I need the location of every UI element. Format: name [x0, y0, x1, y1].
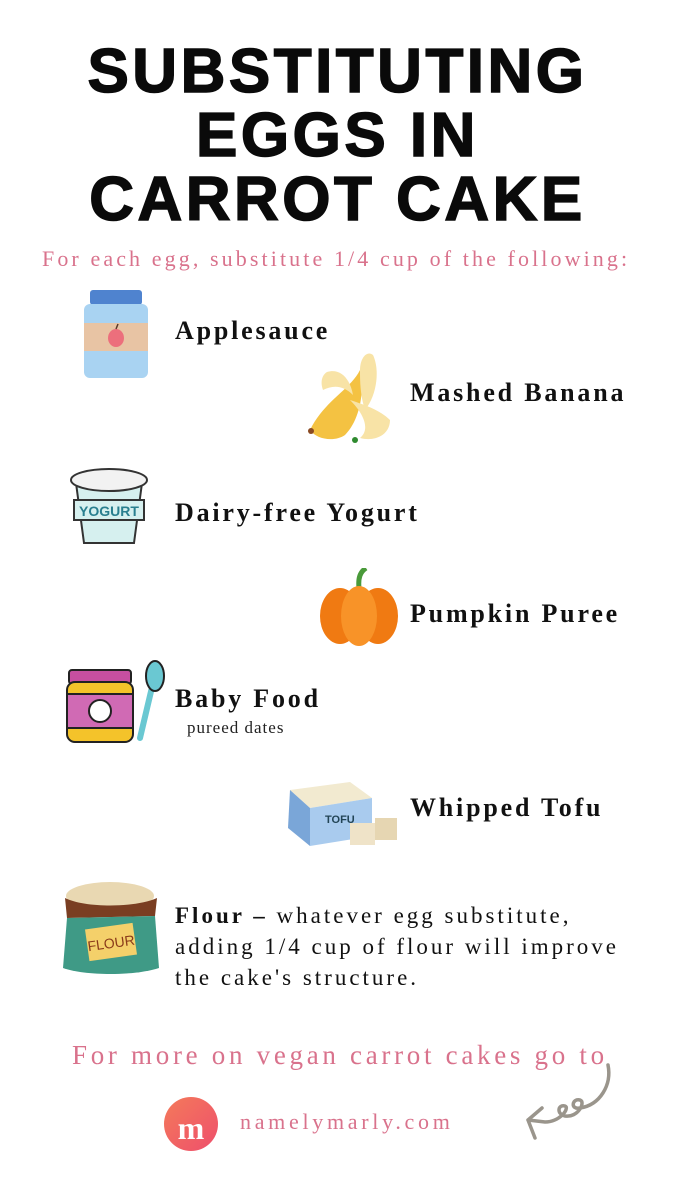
title: SUBSTITUTING: [87, 37, 588, 106]
icon: flour bag: [63, 882, 159, 974]
text: flour note: adding 1/4 cup of flour will improve: [175, 934, 619, 959]
icon: banana: [308, 354, 390, 443]
icon: applesauce jar: [84, 290, 148, 378]
icon: yogurt: YOGURT: [79, 503, 139, 519]
icon: pumpkin: [320, 568, 398, 646]
subtitle: For each egg, substitute 1/4 cup of the following:: [42, 246, 630, 271]
label: tofu: Whipped Tofu: [410, 793, 603, 822]
label: baby food: Baby Food: [175, 684, 321, 713]
text: flour note: [175, 903, 619, 990]
text: flour note: Flour – whatever egg substitute,: [175, 903, 571, 928]
icon: logo: [164, 1097, 218, 1151]
text: pureed dates: pureed dates: [187, 718, 284, 737]
icon: logo: m: [178, 1110, 204, 1146]
title: CARROT CAKE: [89, 165, 586, 234]
icon: baby food: [66, 660, 165, 743]
text: flour note: the cake's structure.: [175, 965, 419, 990]
text: website: namelymarly.com: [240, 1109, 454, 1134]
label: applesauce: Applesauce: [175, 316, 330, 345]
label: pumpkin: Pumpkin Puree: [410, 599, 620, 628]
icon: tofu: TOFU: [325, 814, 355, 826]
icon: tofu: [288, 782, 397, 846]
title: [87, 37, 588, 234]
label: yogurt: Dairy-free Yogurt: [175, 498, 420, 527]
footer text: For more on vegan carrot cakes go to: [72, 1040, 608, 1070]
icon: yogurt: [70, 468, 148, 544]
arrow: squiggle: [526, 1063, 611, 1140]
label: mashed banana: Mashed Banana: [410, 378, 626, 407]
icon: flour bag: FLOUR: [87, 932, 136, 954]
title: EGGS IN: [196, 101, 479, 170]
